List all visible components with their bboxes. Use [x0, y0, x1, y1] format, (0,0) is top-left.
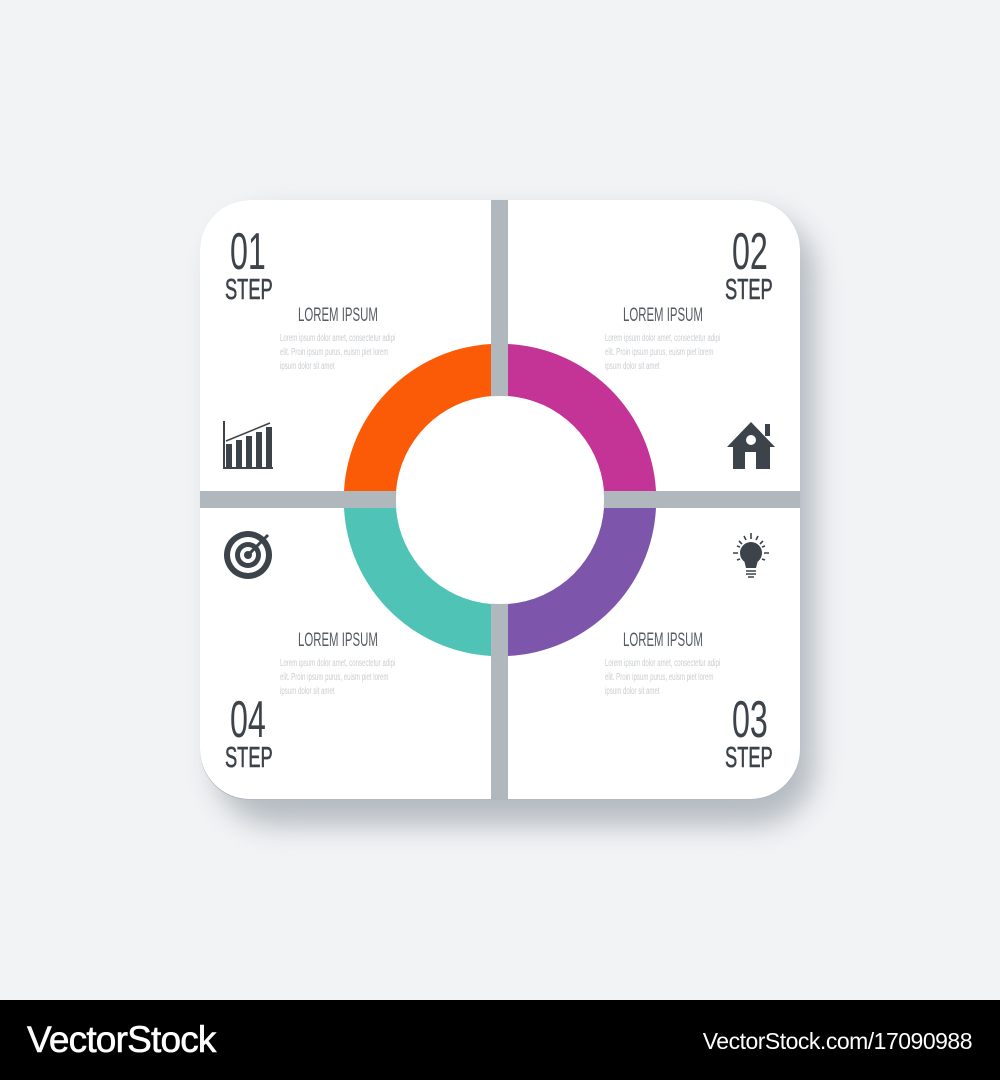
- text block 3: LOREM IPSUM: [623, 630, 703, 651]
- text block 2: [605, 305, 720, 372]
- footer: VectorStock: [27, 1019, 216, 1060]
- text block 1: ipsum dolor sit amet: [280, 361, 335, 372]
- center circle: [396, 396, 604, 604]
- panel: step 1: [200, 200, 491, 491]
- ring segment purple: [508, 508, 656, 656]
- step 3 label: 03: [732, 691, 768, 749]
- gap cross background: [200, 200, 800, 800]
- text: STEP: [725, 742, 773, 774]
- panel: step 3: [508, 508, 800, 799]
- panel: step 4: [200, 508, 491, 799]
- ring segment magenta: [508, 344, 656, 491]
- footer: [0, 1000, 1000, 1080]
- ring segment teal: [344, 508, 491, 656]
- icon: target: [224, 531, 272, 579]
- icon: light bulb: [733, 533, 769, 577]
- ring segment orange: [344, 344, 491, 491]
- step 2 label: 02: [732, 223, 768, 281]
- panel: step 2: [508, 200, 800, 491]
- text block 4: Lorem ipsum dolor amet, consectetur adipi: [280, 658, 395, 669]
- text block 2: elit. Proin ipsum purus, euism piet lorem: [605, 347, 713, 358]
- text block 3: ipsum dolor sit amet: [605, 686, 660, 697]
- text block 4: LOREM IPSUM: [298, 630, 378, 651]
- text block 1: LOREM IPSUM: [298, 305, 378, 326]
- text block 4: ipsum dolor sit amet: [280, 686, 335, 697]
- text block 2: LOREM IPSUM: [623, 305, 703, 326]
- icon: bar chart: [223, 421, 273, 469]
- text block 1: elit. Proin ipsum purus, euism piet lorem: [280, 347, 388, 358]
- text block 3: Lorem ipsum dolor amet, consectetur adipi: [605, 658, 720, 669]
- text: STEP: [725, 274, 773, 306]
- text: STEP: [225, 742, 273, 774]
- text block 3: [605, 630, 720, 697]
- text: STEP: [225, 274, 273, 306]
- footer: VectorStock.com/17090988: [703, 1028, 972, 1054]
- text block 4: [280, 630, 395, 697]
- step 1 label: 01: [230, 223, 266, 281]
- step 4 label: 04: [230, 691, 266, 749]
- text block 1: Lorem ipsum dolor amet, consectetur adipi: [280, 333, 395, 344]
- icon: house: [727, 422, 775, 469]
- text block 2: ipsum dolor sit amet: [605, 361, 660, 372]
- text block 4: elit. Proin ipsum purus, euism piet lorem: [280, 672, 388, 683]
- text block 3: elit. Proin ipsum purus, euism piet lorem: [605, 672, 713, 683]
- text block 2: Lorem ipsum dolor amet, consectetur adipi: [605, 333, 720, 344]
- text block 1: [280, 305, 395, 372]
- shadow backdrop: [215, 215, 815, 825]
